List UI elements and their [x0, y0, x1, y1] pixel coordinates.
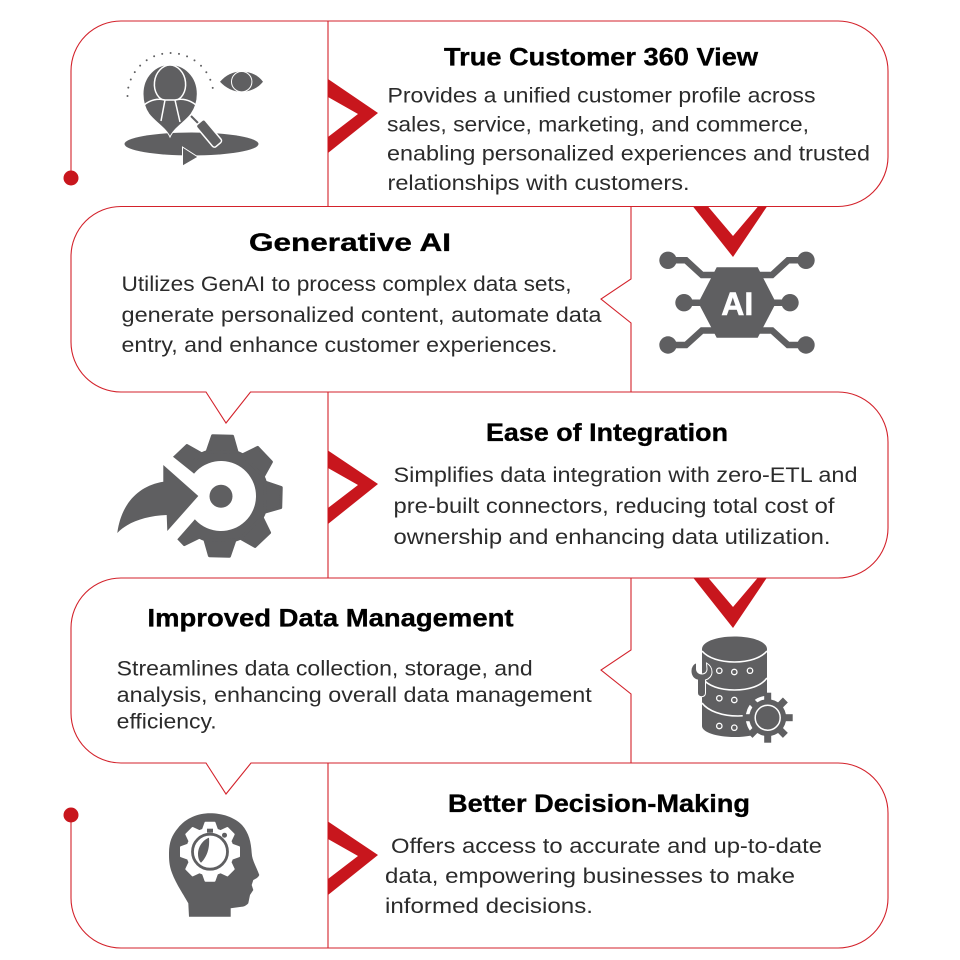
body text	[385, 834, 822, 918]
panel: True Customer 360 View	[64, 21, 888, 206]
body text: entry, and enhance customer experiences.	[122, 333, 558, 357]
body text: informed decisions.	[385, 894, 593, 918]
panel: Better Decision-Making	[64, 763, 888, 948]
arrow chevron	[693, 578, 767, 628]
panel outline	[121, 392, 888, 578]
panel divider with notch	[601, 206, 631, 392]
body text: Provides a unified customer profile across	[388, 83, 816, 107]
end dot	[64, 808, 78, 822]
panel divider	[327, 763, 329, 948]
body text: Streamlines data collection, storage, and	[117, 656, 533, 680]
body text: pre-built connectors, reducing total cost of	[394, 494, 835, 518]
heading: Better Decision-Making	[448, 790, 750, 818]
start dot	[64, 170, 78, 186]
icon: customer profile with eye and magnifier	[124, 53, 263, 166]
body text: data, empowering businesses to make	[385, 864, 795, 888]
panel: Improved Data Management	[71, 578, 838, 794]
icon: head with gear and stopwatch	[169, 813, 259, 917]
body text: analysis, enhancing overall data management	[117, 683, 592, 707]
icon: database with wrench and gear	[691, 636, 793, 743]
arrow chevron	[328, 450, 378, 524]
body text: Offers access to accurate and up-to-date	[391, 834, 822, 858]
panel outline	[71, 578, 838, 794]
panel: Ease of Integration	[117, 392, 888, 578]
panel divider with notch	[601, 578, 631, 763]
panel outline	[71, 206, 631, 423]
body text: Utilizes GenAI to process complex data sets,	[122, 272, 572, 296]
heading: Generative AI	[249, 229, 451, 257]
panel divider	[327, 21, 329, 206]
heading: True Customer 360 View	[444, 44, 759, 72]
heading: Ease of Integration	[486, 419, 728, 447]
body text: generate personalized content, automate data	[122, 303, 602, 327]
arrow chevron	[328, 79, 378, 153]
body text: enabling personalized experiences and trusted	[387, 142, 870, 166]
panel outline	[71, 21, 888, 206]
body text: sales, service, marketing, and commerce,	[387, 112, 809, 136]
arrow chevron	[693, 206, 767, 257]
body text	[394, 463, 858, 549]
body text	[122, 272, 602, 357]
heading: Improved Data Management	[148, 605, 514, 633]
body text	[117, 656, 592, 733]
body text: relationships with customers.	[388, 171, 690, 195]
arrow chevron	[328, 822, 378, 895]
icon: arrow into gear	[117, 430, 283, 560]
body text	[387, 83, 870, 195]
panel: Generative AI	[71, 206, 815, 423]
body text: efficiency.	[117, 709, 217, 733]
panel divider	[327, 392, 329, 578]
body text: Simplifies data integration with zero-ETL and	[394, 463, 858, 487]
icon: AI chip: AI	[721, 286, 753, 322]
panel outline	[71, 763, 888, 948]
icon: AI chip	[659, 252, 815, 354]
body text: ownership and enhancing data utilization.	[394, 525, 830, 549]
